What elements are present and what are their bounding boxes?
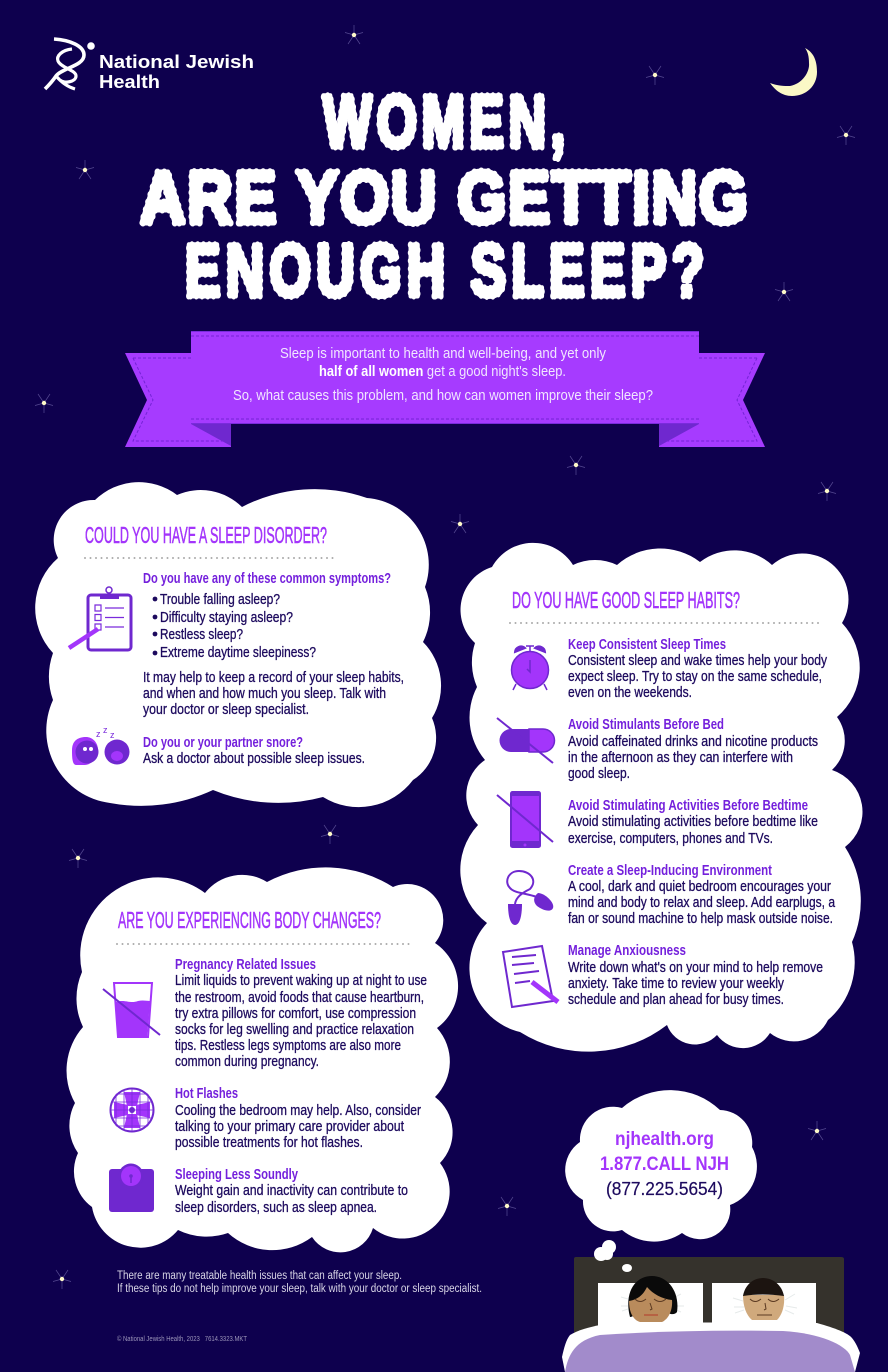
panel: could you have a sleep disorder (35, 482, 441, 807)
panel: do you have good sleep habits: Avoid Stimulants Before Bed (568, 717, 724, 733)
title: WOMEN, (323, 80, 565, 163)
panel: are you experiencing body changes: try extra pillows for comfort, use compression (175, 1006, 416, 1022)
icon: fan (110, 1088, 154, 1132)
panel: are you experiencing body changes: sleep disorders, such as sleep apnea. (175, 1200, 377, 1216)
panel: do you have good sleep habits: Avoid stimulating activities before bedtime like (568, 814, 818, 830)
logo: National Jewish Health: Health (99, 72, 160, 92)
panel: do you have good sleep habits (460, 543, 862, 1052)
icon: snoring couple (72, 725, 130, 765)
title: WOMEN, (323, 80, 565, 163)
panel: could you have a sleep disorder: and when and how much you sleep. Talk with (143, 686, 386, 702)
icon: crescent moon (770, 48, 817, 96)
banner ribbon (125, 331, 765, 447)
panel: are you experiencing body changes: socks for leg swelling and practice relaxation (175, 1022, 414, 1038)
symptom list (153, 592, 316, 661)
panel: are you experiencing body changes: possible treatments for hot flashes. (175, 1135, 363, 1151)
panel: could you have a sleep disorder: your doctor or sleep specialist. (143, 702, 309, 718)
panel: do you have good sleep habits: mind and body to relax and sleep. Add earplugs, a (568, 895, 836, 911)
icon: snoring couple: z (103, 725, 108, 735)
title: ENOUGH SLEEP? (185, 229, 704, 312)
panel: do you have good sleep habits: Manage Anxiousness (568, 943, 686, 959)
panel: do you have good sleep habits: good sleep. (568, 766, 630, 782)
icon: earplugs (507, 871, 553, 925)
banner ribbon: half of all women get a good night's sleep. (319, 363, 566, 380)
title: ARE YOU GETTING (140, 156, 748, 239)
banner ribbon: Sleep is important to health and well-being, and yet only (280, 345, 606, 362)
logo: National Jewish Health (45, 39, 254, 92)
symptom list: Trouble falling asleep? (160, 592, 280, 608)
panel: do you have good sleep habits: in the afternoon as they can interfere with (568, 750, 793, 766)
panel: are you experiencing body changes: tips. Restless legs symptoms are also more (175, 1038, 401, 1054)
icon: glass of water crossed out (103, 983, 160, 1037)
symptom list: Restless sleep? (160, 627, 243, 643)
panel: do you have good sleep habits: fan or sound machine to help mask outside noise. (568, 911, 833, 927)
panel: are you experiencing body changes: talking to your primary care provider about (175, 1119, 404, 1135)
panel: are you experiencing body changes: Sleeping Less Soundly (175, 1167, 298, 1183)
thought bubble: contact details (565, 1090, 757, 1272)
panel: are you experiencing body changes: Hot Flashes (175, 1086, 238, 1102)
panel: do you have good sleep habits: schedule and plan ahead for busy times. (568, 992, 784, 1008)
footer note: There are many treatable health issues that can affect your sleep. (117, 1270, 402, 1282)
panel: are you experiencing body changes (67, 867, 458, 1252)
thought bubble: contact details: (877.225.5654) (606, 1179, 723, 1199)
symptom list: Extreme daytime sleepiness? (160, 645, 316, 661)
panel: could you have a sleep disorder: Do you or your partner snore? (143, 735, 303, 751)
panel: are you experiencing body changes: Limit liquids to prevent waking up at night to use (175, 973, 427, 989)
panel: do you have good sleep habits: anxiety. Take time to review your weekly (568, 976, 785, 992)
title: ENOUGH SLEEP? (185, 229, 704, 312)
symptom list: Difficulty staying asleep? (160, 610, 293, 626)
banner ribbon: So, what causes this problem, and how can women improve their sleep? (233, 387, 653, 404)
panel: do you have good sleep habits: exercise, computers, phones and TVs. (568, 831, 773, 847)
panel: do you have good sleep habits: A cool, dark and quiet bedroom encourages your (568, 879, 831, 895)
icon: weight scale (109, 1164, 154, 1212)
panel: could you have a sleep disorder: Ask a doctor about possible sleep issues. (143, 751, 365, 767)
panel: do you have good sleep habits: expect sleep. Try to stay on the same schedule, (568, 669, 822, 685)
illustration: couple sleeping in bed (562, 1257, 860, 1372)
panel: do you have good sleep habits: Avoid Stimulating Activities Before Bedtime (568, 798, 808, 814)
icon: phone crossed out (497, 791, 553, 848)
panel: do you have good sleep habits: Keep Consistent Sleep Times (568, 637, 726, 653)
panel: do you have good sleep habits: Avoid caffeinated drinks and nicotine products (568, 734, 818, 750)
icon: snoring couple: z (96, 729, 101, 739)
copyright: © National Jewish Health, 2023 7614.3323.MKT (117, 1335, 248, 1343)
icon: snoring couple: z (110, 730, 115, 740)
panel: could you have a sleep disorder: It may help to keep a record of your sleep habits, (143, 670, 404, 686)
panel: are you experiencing body changes: the restroom, avoid foods that cause heartburn, (175, 990, 424, 1006)
logo: National Jewish Health: National Jewish (99, 52, 254, 72)
thought bubble: contact details: 1.877.CALL NJH (600, 1154, 729, 1175)
title (140, 80, 748, 312)
icon: notepad and pencil (503, 946, 558, 1007)
thought bubble: contact details: njhealth.org (615, 1129, 714, 1150)
footer note: If these tips do not help improve your sleep, talk with your doctor or sleep specialist. (117, 1283, 482, 1295)
panel: could you have a sleep disorder: Do you have any of these common symptoms? (143, 571, 391, 587)
icon: alarm clock (512, 646, 548, 690)
panel: do you have good sleep habits: even on the weekends. (568, 685, 692, 701)
title: ARE YOU GETTING (140, 156, 748, 239)
panel: are you experiencing body changes: Cooling the bedroom may help. Also, consider (175, 1103, 421, 1119)
icon: clipboard (69, 587, 131, 650)
panel: are you experiencing body changes: ARE YOU EXPERIENCING BODY CHANGES? (118, 907, 381, 933)
panel: are you experiencing body changes: Pregnancy Related Issues (175, 957, 316, 973)
panel: do you have good sleep habits: Create a Sleep-Inducing Environment (568, 863, 772, 879)
icon: pill crossed out (497, 718, 554, 763)
footer note (117, 1270, 482, 1295)
panel: are you experiencing body changes: common during pregnancy. (175, 1054, 319, 1070)
panel: could you have a sleep disorder: COULD YOU HAVE A SLEEP DISORDER? (85, 522, 327, 548)
panel: do you have good sleep habits: Consistent sleep and wake times help your body (568, 653, 828, 669)
panel: do you have good sleep habits: Write down what's on your mind to help remove (568, 960, 823, 976)
panel: are you experiencing body changes: Weight gain and inactivity can contribute to (175, 1183, 408, 1199)
